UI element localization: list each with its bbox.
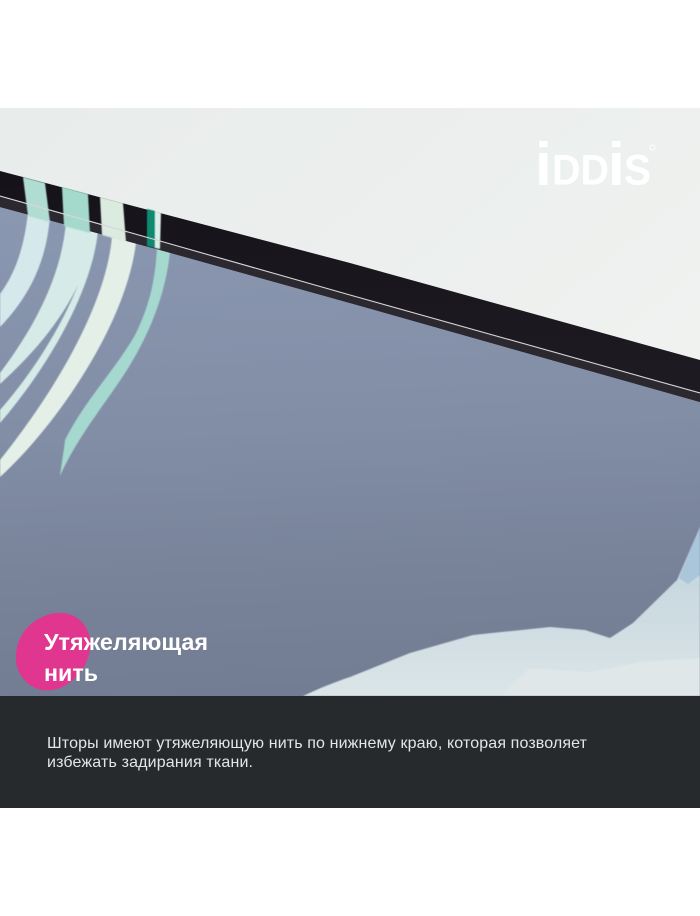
description text line 2: избежать задирания ткани. <box>47 754 253 771</box>
description text line 1: Шторы имеют утяжеляющую нить по нижнему краю, которая позволяет <box>47 735 588 752</box>
photo: curtain fabric <box>0 205 700 696</box>
curtain hem band <box>0 171 700 402</box>
hem stitch line <box>0 196 700 393</box>
photo: wall background <box>0 108 700 696</box>
panel: description <box>0 696 700 808</box>
logo: IDDIS: S <box>624 146 651 194</box>
hem printed stripes <box>23 177 161 249</box>
logo: IDDIS <box>535 131 655 198</box>
heading: Утяжеляющая <box>44 629 208 655</box>
logo: IDDIS: DD <box>552 146 609 194</box>
heading second line: нить <box>44 660 98 686</box>
leaf strands print <box>0 212 170 477</box>
logo: IDDIS: i <box>608 131 625 198</box>
logo: IDDIS: i <box>535 131 552 198</box>
pink blob <box>16 613 90 690</box>
snowy mountain print <box>303 527 700 696</box>
hem lower strip <box>0 196 700 402</box>
